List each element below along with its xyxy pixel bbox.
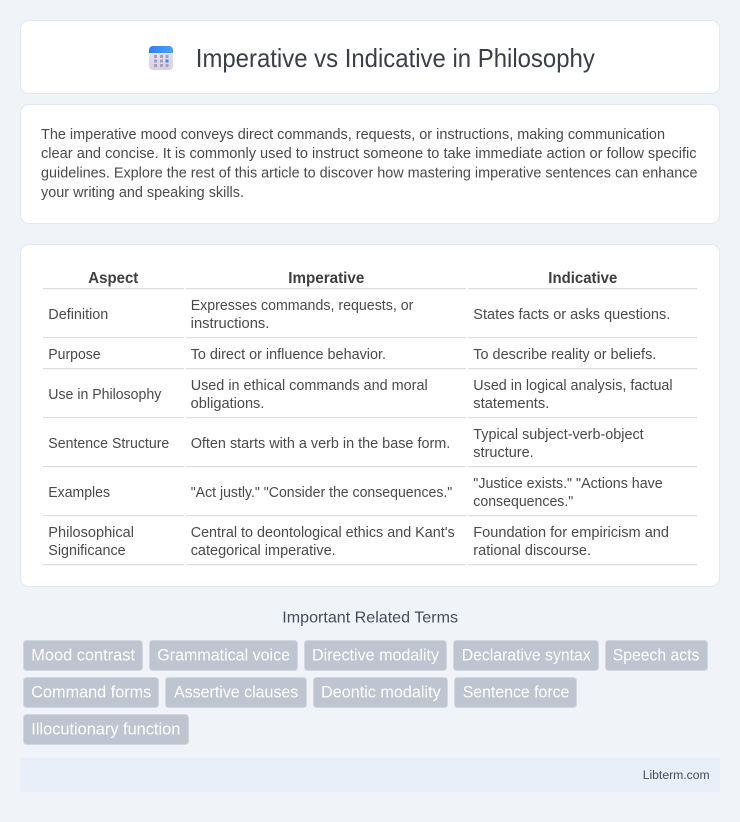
- footer: [20, 758, 720, 792]
- row: definition: [48, 298, 670, 332]
- tag: deontic modality: Deontic modality: [321, 684, 442, 702]
- row: definition: Expresses commands, requests, or: [191, 298, 414, 314]
- tag: command forms: [24, 678, 158, 708]
- row: philosophical significance: rational discourse.: [473, 543, 591, 559]
- table header row: Indicative: [548, 270, 618, 287]
- row: sentence structure: Sentence Structure: [48, 436, 169, 452]
- tag: mood contrast: Mood contrast: [31, 647, 136, 665]
- row: philosophical significance: Significance: [48, 543, 126, 559]
- intro paragraph: your writing and speaking skills.: [41, 185, 244, 201]
- tag: declarative syntax: [454, 640, 598, 670]
- row: definition: Definition: [48, 307, 108, 323]
- table header row: [88, 270, 618, 287]
- row: examples: [48, 476, 663, 510]
- row: examples: consequences.": [473, 494, 573, 510]
- table rules: [43, 288, 697, 565]
- row: use in philosophy: Used in ethical commands and moral: [191, 378, 428, 394]
- panel: related term tags: [24, 640, 708, 744]
- row: use in philosophy: statements.: [473, 396, 549, 412]
- row: examples: "Justice exists." "Actions have: [473, 476, 663, 492]
- row: use in philosophy: Used in logical analysis, factual: [473, 378, 673, 394]
- row: sentence structure: [48, 427, 644, 461]
- panel: intro text: [20, 104, 720, 224]
- row: purpose: [48, 347, 656, 363]
- heading: related terms: Important Related Terms: [282, 610, 458, 627]
- table header row: Aspect: [88, 270, 138, 287]
- tag: speech acts: Speech acts: [613, 647, 699, 665]
- row: purpose: Purpose: [48, 347, 101, 363]
- row: use in philosophy: Use in Philosophy: [48, 387, 162, 403]
- tag: illocutionary function: [24, 714, 188, 744]
- row: philosophical significance: [48, 525, 669, 559]
- intro paragraph: clear and concise. It is commonly used to instruct someone to take immediate action or follow specific: [41, 146, 697, 162]
- tag: mood contrast: [24, 640, 142, 670]
- title: Imperative vs Indicative in Philosophy: [196, 45, 595, 73]
- panel: comparison table: [20, 244, 720, 586]
- row: sentence structure: structure.: [473, 445, 534, 461]
- tag: directive modality: Directive modality: [312, 647, 440, 665]
- row: use in philosophy: obligations.: [191, 396, 264, 412]
- row: philosophical significance: Philosophical: [48, 525, 134, 541]
- row: sentence structure: Often starts with a verb in the base form.: [191, 436, 450, 452]
- footer: Libterm.com: [643, 768, 710, 782]
- tag: deontic modality: [314, 678, 448, 708]
- row: definition: States facts or asks questions.: [473, 307, 670, 323]
- tag: assertive clauses: Assertive clauses: [174, 684, 298, 702]
- row: philosophical significance: categorical imperative.: [191, 543, 336, 559]
- tag: command forms: Command forms: [31, 684, 151, 702]
- row: purpose: To describe reality or beliefs.: [473, 347, 656, 363]
- intro paragraph: guidelines. Explore the rest of this article to discover how mastering imperative sentences can enhance: [41, 166, 698, 182]
- row: philosophical significance: Central to deontological ethics and Kant's: [191, 525, 455, 541]
- icon: calendar: [149, 46, 173, 70]
- tag: directive modality: [304, 640, 446, 670]
- tag: speech acts: [606, 640, 708, 670]
- intro paragraph: The imperative mood conveys direct commands, requests, or instructions, making communication: [41, 127, 665, 143]
- tag: declarative syntax: Declarative syntax: [462, 647, 591, 665]
- row: use in philosophy: [48, 378, 673, 412]
- table header row: Imperative: [288, 270, 365, 287]
- intro paragraph: [41, 127, 698, 201]
- row: sentence structure: Typical subject-verb-object: [473, 427, 644, 443]
- row: examples: "Act justly." "Consider the consequences.": [191, 485, 452, 501]
- row: purpose: To direct or influence behavior.: [191, 347, 386, 363]
- row: definition: instructions.: [191, 316, 269, 332]
- tag: assertive clauses: [166, 678, 306, 708]
- row: examples: Examples: [48, 485, 110, 501]
- tag: sentence force: [454, 678, 576, 708]
- tag: grammatical voice: [150, 640, 298, 670]
- tag: sentence force: Sentence force: [463, 684, 569, 702]
- tag: grammatical voice: Grammatical voice: [157, 647, 290, 665]
- panel: header: [20, 20, 720, 94]
- row: philosophical significance: Foundation for empiricism and: [473, 525, 669, 541]
- tag: illocutionary function: Illocutionary function: [31, 721, 180, 739]
